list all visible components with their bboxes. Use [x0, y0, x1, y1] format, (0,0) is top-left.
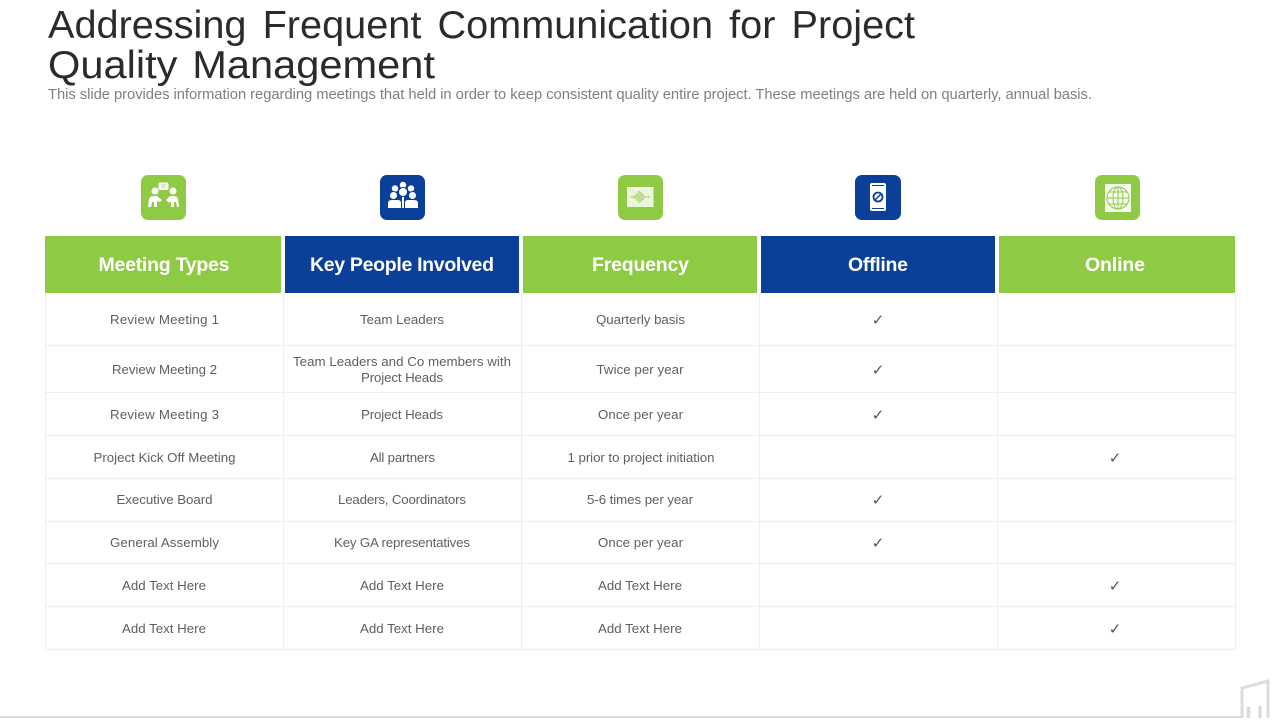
header: Key People Involved: Key People Involved — [310, 254, 494, 276]
row: Review Meeting 2: Review Meeting 2 — [112, 362, 217, 377]
row: Review Meeting 2: Twice per year — [596, 362, 684, 377]
row: Review Meeting 1: Review Meeting 1 — [110, 312, 219, 327]
row: Project Kick Off Meeting — [94, 449, 1121, 467]
title: Quality Management — [48, 44, 435, 87]
header: Meeting Types: Meeting Types — [98, 254, 230, 276]
row: General Assembly: General Assembly — [110, 535, 219, 550]
row: Review Meeting 2: Project Heads — [361, 370, 443, 385]
row: Review Meeting 3: ✓ — [872, 406, 884, 424]
row: Review Meeting 2 — [112, 354, 884, 385]
row: Add Text Here 2: ✓ — [1109, 620, 1121, 638]
row: Executive Board: ✓ — [872, 491, 884, 509]
header: Offline — [761, 236, 995, 293]
header: Frequency — [523, 236, 757, 293]
row: Review Meeting 1: Quarterly basis — [596, 312, 685, 327]
row: Executive Board: Executive Board — [116, 492, 212, 507]
row: Review Meeting 2: Team Leaders and Co members with — [293, 354, 511, 369]
row: Add Text Here 2: Add Text Here — [360, 621, 444, 636]
row: Review Meeting 2: ✓ — [872, 361, 884, 379]
icon: footer building — [1242, 681, 1268, 718]
table body — [45, 293, 1236, 650]
row: Review Meeting 1: Team Leaders — [360, 312, 444, 327]
row: Review Meeting 3: Project Heads — [361, 407, 443, 422]
title: Addressing Frequent Communication for Project — [48, 4, 915, 47]
row: Project Kick Off Meeting: ✓ — [1109, 449, 1121, 467]
row: Add Text Here 2: Add Text Here — [598, 621, 682, 636]
footer line — [0, 716, 1241, 718]
header: Offline: Offline — [848, 254, 908, 276]
row: Review Meeting 1 — [110, 311, 884, 329]
row: Add Text Here 2 — [122, 620, 1121, 638]
row: Executive Board: 5-6 times per year — [587, 492, 694, 507]
row: Add Text Here 1: Add Text Here — [122, 578, 206, 593]
header: Meeting Types — [45, 236, 281, 293]
icon row — [141, 175, 1140, 220]
row: Review Meeting 3: Review Meeting 3 — [110, 407, 219, 422]
title — [48, 4, 915, 87]
header: Online: Online — [1085, 254, 1145, 276]
icon: globe window — [1095, 175, 1140, 220]
row: Project Kick Off Meeting: Project Kick Off Meeting — [94, 450, 236, 465]
row: Add Text Here 1: ✓ — [1109, 577, 1121, 595]
row: General Assembly: ✓ — [872, 534, 884, 552]
table header row — [45, 236, 1235, 293]
row: Project Kick Off Meeting: All partners — [370, 450, 435, 465]
icon: audio screen — [618, 175, 663, 220]
header: Frequency: Frequency — [592, 254, 689, 276]
row: General Assembly: Once per year — [598, 535, 684, 550]
row: Review Meeting 1: ✓ — [872, 311, 884, 329]
row: Executive Board — [116, 491, 884, 509]
subtitle: This slide provides information regarding meetings that held in order to keep consistent quality entire project. These meetings are held on quarterly, annual basis. — [48, 87, 1092, 103]
row: Add Text Here 1 — [122, 577, 1121, 595]
row: Add Text Here 1: Add Text Here — [360, 578, 444, 593]
icon: group of people — [380, 175, 425, 220]
row: General Assembly — [110, 534, 884, 552]
row: General Assembly: Key GA representatives — [334, 535, 470, 550]
icon: phone blocked — [855, 175, 901, 220]
row: Review Meeting 3 — [110, 406, 884, 424]
header: Online — [999, 236, 1235, 293]
icon: meeting handshake — [141, 175, 186, 220]
row: Review Meeting 3: Once per year — [598, 407, 684, 422]
row: Project Kick Off Meeting: 1 prior to project initiation — [568, 450, 714, 465]
row: Add Text Here 1: Add Text Here — [598, 578, 682, 593]
row: Executive Board: Leaders, Coordinators — [338, 492, 466, 507]
header: Key People Involved — [285, 236, 519, 293]
row: Add Text Here 2: Add Text Here — [122, 621, 206, 636]
